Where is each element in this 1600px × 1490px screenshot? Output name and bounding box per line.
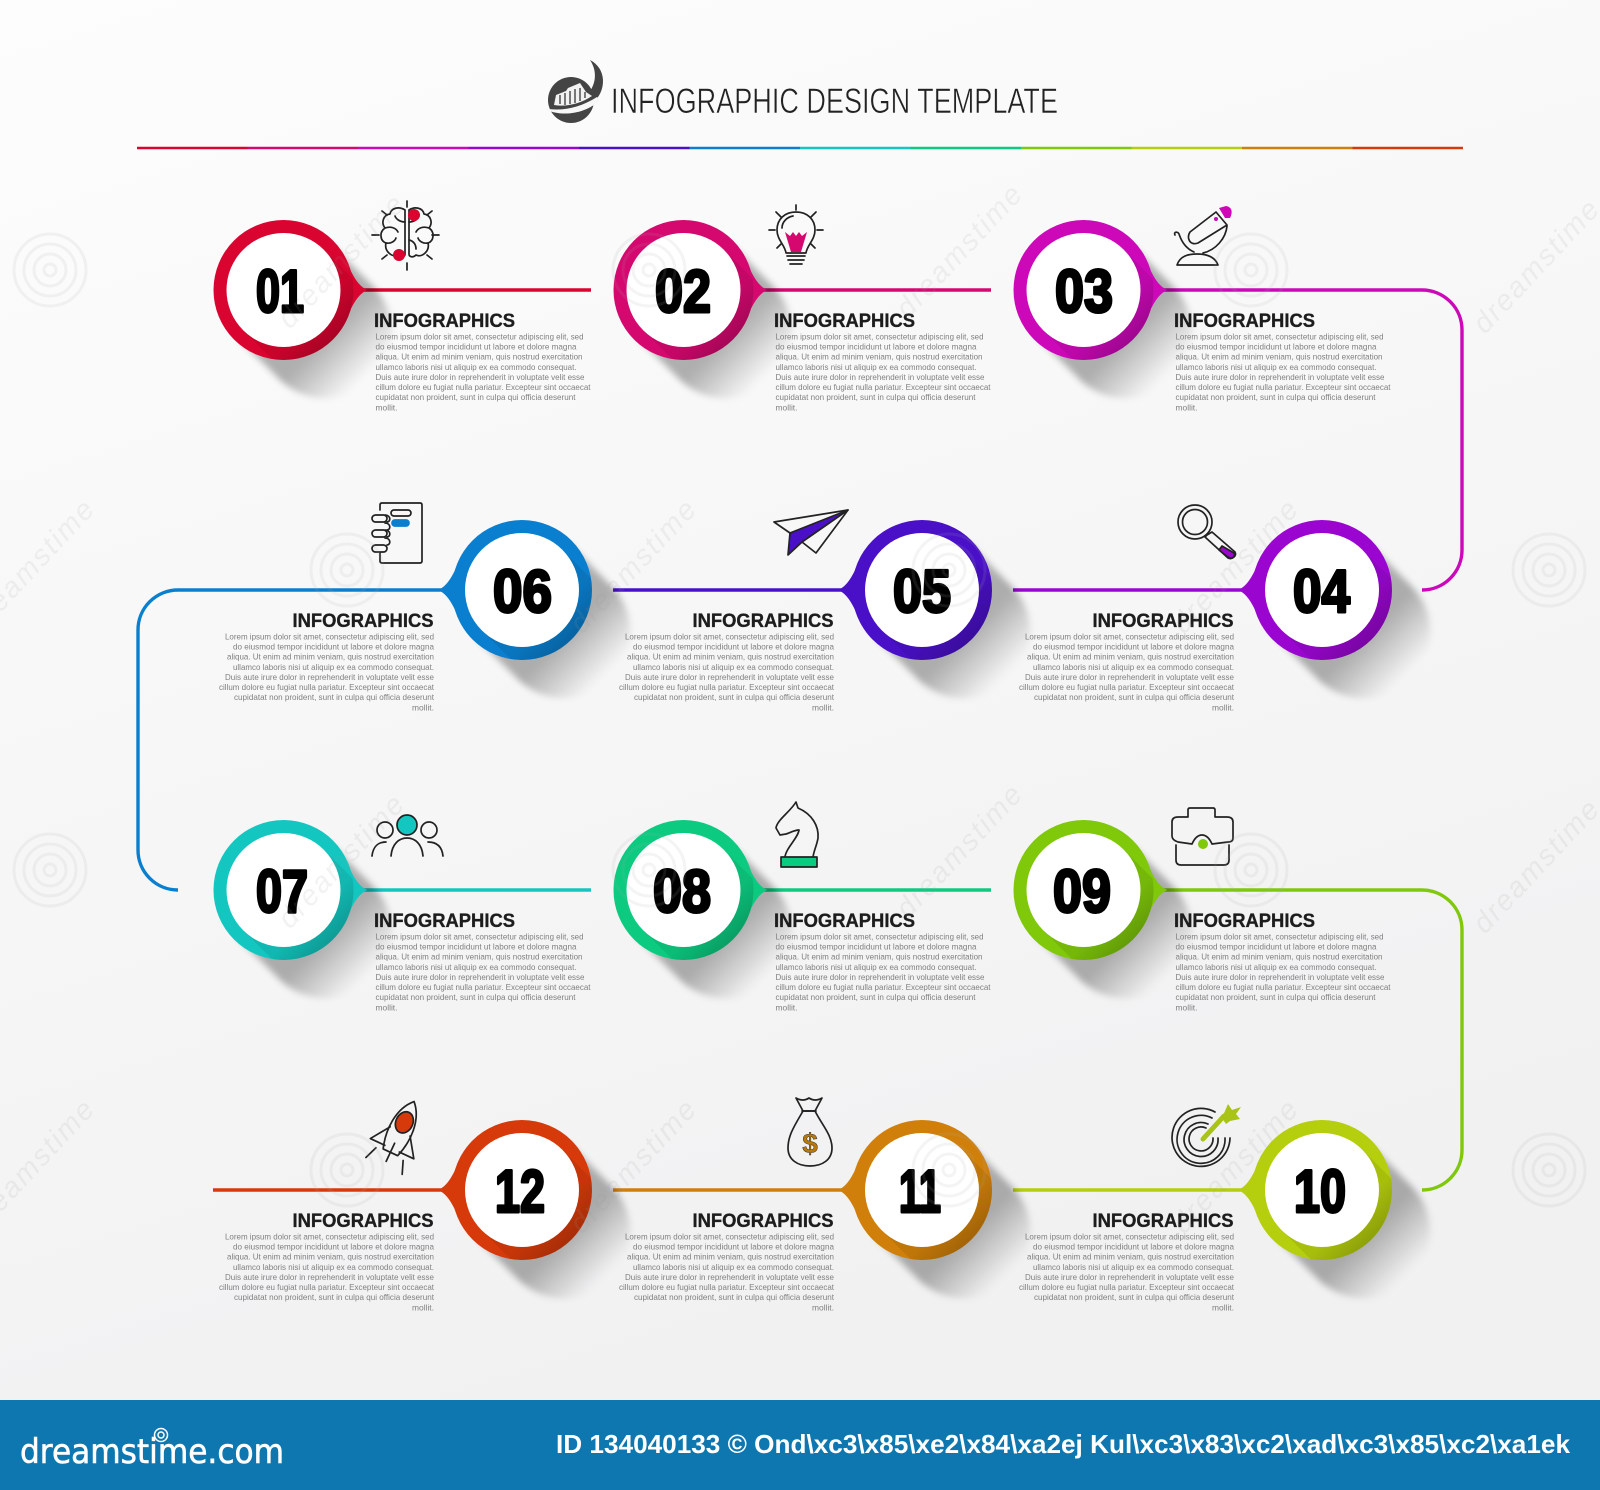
watermark text: dreamstime (890, 178, 1030, 325)
body text 12: cillum dolore eu fugiat nulla pariatur. Excepteur sint occaecat (219, 1282, 435, 1292)
badge 04 (1238, 520, 1458, 726)
step 06 (138, 503, 658, 890)
number 03: 03 (1055, 258, 1113, 325)
body text 06: Duis aute irure dolor in reprehenderit in voluptate velit esse (225, 672, 434, 682)
body text 04: Lorem ipsum dolor sit amet, consectetur adipiscing elit, sed (1025, 632, 1234, 642)
number 05: 05 (893, 558, 951, 625)
watermark text: dreamstime (1166, 1093, 1306, 1240)
body text 05: cillum dolore eu fugiat nulla pariatur. Excepteur sint occaecat (619, 682, 835, 692)
watermark text: dreamstime (564, 1093, 704, 1240)
icon: light bulb (769, 205, 823, 264)
icon: brain (372, 201, 439, 270)
body text 09: Lorem ipsum dolor sit amet, consectetur adipiscing elit, sed (1176, 932, 1384, 942)
icon: notebook (372, 503, 422, 563)
body text 05: Lorem ipsum dolor sit amet, consectetur adipiscing elit, sed (625, 632, 834, 642)
number 02: 02 (655, 258, 711, 325)
badge 12 (438, 1120, 658, 1326)
body text 09: do eiusmod tempor incididunt ut labore et dolore magna (1176, 942, 1377, 952)
body text 10: cillum dolore eu fugiat nulla pariatur. Excepteur sint occaecat (1019, 1282, 1235, 1292)
body text 08: ullamco laboris nisi ut aliquip ex ea commodo consequat. (776, 962, 976, 972)
body text 07: Duis aute irure dolor in reprehenderit in voluptate velit esse (376, 972, 585, 982)
body text 08: aliqua. Ut enim ad minim veniam, quis nostrud exercitation (776, 952, 983, 962)
connector 03 (1160, 290, 1462, 590)
body text 04: aliqua. Ut enim ad minim veniam, quis nostrud exercitation (1027, 652, 1234, 662)
badge 01 (214, 220, 419, 426)
connector 12 (213, 1188, 445, 1192)
number 04: 04 (1293, 558, 1351, 625)
body text 10: mollit. (1212, 1302, 1234, 1312)
body text 06 (219, 632, 435, 712)
connector 10 (1013, 1188, 1245, 1192)
icon: microscope (1175, 206, 1232, 265)
badge 05 (838, 520, 1058, 726)
icon: rocket (362, 1091, 436, 1176)
body text 07: mollit. (376, 1002, 398, 1012)
footer band (0, 1400, 1600, 1490)
step 09 (1014, 808, 1462, 1190)
body text 02: Lorem ipsum dolor sit amet, consectetur adipiscing elit, sed (776, 332, 984, 342)
body text 03: mollit. (1176, 402, 1198, 412)
body text 08: mollit. (776, 1002, 798, 1012)
watermark text: dreamstime (564, 493, 704, 640)
body text 11: ullamco laboris nisi ut aliquip ex ea commodo consequat. (633, 1262, 834, 1272)
body text 12: aliqua. Ut enim ad minim veniam, quis nostrud exercitation (227, 1252, 434, 1262)
connector 07 (360, 888, 591, 892)
body text 03 (1176, 332, 1391, 412)
body text 02: ullamco laboris nisi ut aliquip ex ea commodo consequat. (776, 362, 976, 372)
body text 03: Lorem ipsum dolor sit amet, consectetur adipiscing elit, sed (1176, 332, 1384, 342)
body text 03: aliqua. Ut enim ad minim veniam, quis nostrud exercitation (1176, 352, 1383, 362)
icon: magnifier (1178, 505, 1235, 559)
header title: INFOGRAPHIC DESIGN TEMPLATE (611, 82, 1058, 121)
badge 08 (614, 820, 819, 1026)
body text 07: aliqua. Ut enim ad minim veniam, quis nostrud exercitation (376, 952, 583, 962)
body text 05 (619, 632, 835, 712)
heading 05: INFOGRAPHICS (692, 610, 834, 632)
badge 09 (1014, 820, 1219, 1026)
heading 02: INFOGRAPHICS (774, 310, 915, 332)
body text 07: ullamco laboris nisi ut aliquip ex ea commodo consequat. (376, 962, 576, 972)
body text 06: mollit. (412, 702, 434, 712)
connector 06 (138, 590, 445, 890)
watermark text: dreamstime (890, 778, 1030, 925)
body text 05: aliqua. Ut enim ad minim veniam, quis nostrud exercitation (627, 652, 834, 662)
footer credit: ID 134040133 © Ond\xc3\x85\xe2\x84\xa2ej Kul\xc3\x83\xc2\xad\xc3\x85\xc2\xa1ek (556, 1429, 1571, 1459)
step 10 (1013, 1104, 1458, 1326)
body text 11: mollit. (812, 1302, 834, 1312)
heading 04: INFOGRAPHICS (1092, 610, 1234, 632)
body text 05: cupidatat non proident, sunt in culpa qui officia deserunt (634, 692, 835, 702)
body text 06: cupidatat non proident, sunt in culpa qui officia deserunt (234, 692, 435, 702)
body text 08: cillum dolore eu fugiat nulla pariatur. Excepteur sint occaecat (776, 982, 991, 992)
connector 05 (613, 588, 845, 592)
body text 12: cupidatat non proident, sunt in culpa qui officia deserunt (234, 1292, 435, 1302)
body text 08: Lorem ipsum dolor sit amet, consectetur adipiscing elit, sed (776, 932, 984, 942)
body text 09: aliqua. Ut enim ad minim veniam, quis nostrud exercitation (1176, 952, 1383, 962)
body text 10: ullamco laboris nisi ut aliquip ex ea commodo consequat. (1033, 1262, 1234, 1272)
step 04 (1013, 505, 1458, 726)
body text 06: ullamco laboris nisi ut aliquip ex ea commodo consequat. (233, 662, 434, 672)
body text 05: do eiusmod tempor incididunt ut labore et dolore magna (633, 642, 834, 652)
rainbow rule (137, 147, 1463, 149)
body text 07: cupidatat non proident, sunt in culpa qui officia deserunt (376, 992, 576, 1002)
badge 10 (1238, 1120, 1458, 1326)
body text 03: cillum dolore eu fugiat nulla pariatur. Excepteur sint occaecat (1176, 382, 1391, 392)
body text 11: do eiusmod tempor incididunt ut labore et dolore magna (633, 1242, 834, 1252)
heading 03: INFOGRAPHICS (1174, 310, 1315, 332)
body text 01: Lorem ipsum dolor sit amet, consectetur adipiscing elit, sed (376, 332, 584, 342)
body text 04: Duis aute irure dolor in reprehenderit in voluptate velit esse (1025, 672, 1234, 682)
body text 09: mollit. (1176, 1002, 1198, 1012)
heading 01: INFOGRAPHICS (374, 310, 515, 332)
body text 04: cupidatat non proident, sunt in culpa qui officia deserunt (1034, 692, 1235, 702)
body text 02: Duis aute irure dolor in reprehenderit in voluptate velit esse (776, 372, 985, 382)
step 01 (214, 201, 591, 426)
number 12: 12 (495, 1158, 545, 1225)
connector 08 (760, 888, 991, 892)
body text 02: cupidatat non proident, sunt in culpa qui officia deserunt (776, 392, 976, 402)
number 07: 07 (256, 858, 308, 925)
body text 11: cupidatat non proident, sunt in culpa qui officia deserunt (634, 1292, 835, 1302)
body text 10: Duis aute irure dolor in reprehenderit in voluptate velit esse (1025, 1272, 1234, 1282)
step 07 (214, 815, 591, 1026)
body text 09 (1176, 932, 1391, 1012)
heading 09: INFOGRAPHICS (1174, 910, 1315, 932)
body text 07: Lorem ipsum dolor sit amet, consectetur adipiscing elit, sed (376, 932, 584, 942)
body text 07 (376, 932, 591, 1012)
body text 05: Duis aute irure dolor in reprehenderit in voluptate velit esse (625, 672, 834, 682)
icon: money bag (788, 1098, 832, 1166)
connector 11 (613, 1188, 845, 1192)
number 06: 06 (493, 558, 552, 625)
body text 04 (1019, 632, 1235, 712)
body text 03: do eiusmod tempor incididunt ut labore et dolore magna (1176, 342, 1377, 352)
footer logo: dreamstime.com (20, 1432, 284, 1472)
body text 02 (776, 332, 991, 412)
body text 11: aliqua. Ut enim ad minim veniam, quis nostrud exercitation (627, 1252, 834, 1262)
body text 08: do eiusmod tempor incididunt ut labore et dolore magna (776, 942, 977, 952)
body text 06: aliqua. Ut enim ad minim veniam, quis nostrud exercitation (227, 652, 434, 662)
body text 01: cillum dolore eu fugiat nulla pariatur. Excepteur sint occaecat (376, 382, 591, 392)
body text 09: Duis aute irure dolor in reprehenderit in voluptate velit esse (1176, 972, 1385, 982)
body text 01: cupidatat non proident, sunt in culpa qui officia deserunt (376, 392, 576, 402)
watermark text: dreamstime (1166, 493, 1306, 640)
body text 12: Lorem ipsum dolor sit amet, consectetur adipiscing elit, sed (225, 1232, 434, 1242)
number 10: 10 (1294, 1158, 1346, 1225)
body text 08: cupidatat non proident, sunt in culpa qui officia deserunt (776, 992, 976, 1002)
body text 04: ullamco laboris nisi ut aliquip ex ea commodo consequat. (1033, 662, 1234, 672)
icon: people (372, 815, 443, 856)
heading 08: INFOGRAPHICS (774, 910, 915, 932)
watermark spirals (14, 234, 1585, 1206)
number 09: 09 (1053, 858, 1111, 925)
icon: chess knight (776, 802, 818, 867)
body text 05: mollit. (812, 702, 834, 712)
body text 07: do eiusmod tempor incididunt ut labore et dolore magna (376, 942, 577, 952)
body text 09: cillum dolore eu fugiat nulla pariatur. Excepteur sint occaecat (1176, 982, 1391, 992)
body text 01 (376, 332, 591, 412)
header logo (543, 60, 603, 123)
body text 12: do eiusmod tempor incididunt ut labore et dolore magna (233, 1242, 434, 1252)
body text 09: ullamco laboris nisi ut aliquip ex ea commodo consequat. (1176, 962, 1376, 972)
body text 10: Lorem ipsum dolor sit amet, consectetur adipiscing elit, sed (1025, 1232, 1234, 1242)
body text 12 (219, 1232, 435, 1312)
body text 04: mollit. (1212, 702, 1234, 712)
body text 07: cillum dolore eu fugiat nulla pariatur. Excepteur sint occaecat (376, 982, 591, 992)
body text 01: do eiusmod tempor incididunt ut labore et dolore magna (376, 342, 577, 352)
badge 07 (214, 820, 419, 1026)
body text 02: aliqua. Ut enim ad minim veniam, quis nostrud exercitation (776, 352, 983, 362)
body text 06: cillum dolore eu fugiat nulla pariatur. Excepteur sint occaecat (219, 682, 435, 692)
number 08: 08 (653, 858, 711, 925)
badge 11 (838, 1120, 1058, 1326)
body text 01: mollit. (376, 402, 398, 412)
body text 11 (619, 1232, 835, 1312)
body text 03: ullamco laboris nisi ut aliquip ex ea commodo consequat. (1176, 362, 1376, 372)
body text 12: Duis aute irure dolor in reprehenderit in voluptate velit esse (225, 1272, 434, 1282)
body text 10: aliqua. Ut enim ad minim veniam, quis nostrud exercitation (1027, 1252, 1234, 1262)
body text 01: aliqua. Ut enim ad minim veniam, quis nostrud exercitation (376, 352, 583, 362)
body text 10: cupidatat non proident, sunt in culpa qui officia deserunt (1034, 1292, 1235, 1302)
step 12 (213, 1091, 658, 1326)
body text 04: do eiusmod tempor incididunt ut labore et dolore magna (1033, 642, 1234, 652)
body text 09: cupidatat non proident, sunt in culpa qui officia deserunt (1176, 992, 1376, 1002)
icon: target (1172, 1104, 1241, 1166)
watermark text (0, 178, 1600, 1240)
body text 06: Lorem ipsum dolor sit amet, consectetur adipiscing elit, sed (225, 632, 434, 642)
step 03 (1014, 206, 1462, 590)
heading 07: INFOGRAPHICS (374, 910, 515, 932)
step 08 (614, 802, 991, 1026)
body text 11: cillum dolore eu fugiat nulla pariatur. Excepteur sint occaecat (619, 1282, 835, 1292)
connector 09 (1160, 890, 1462, 1190)
number 11: 11 (899, 1158, 941, 1225)
body text 04: cillum dolore eu fugiat nulla pariatur. Excepteur sint occaecat (1019, 682, 1235, 692)
connector 04 (1013, 588, 1245, 592)
step 02 (614, 205, 991, 426)
body text 03: cupidatat non proident, sunt in culpa qui officia deserunt (1176, 392, 1376, 402)
number 01: 01 (256, 258, 304, 325)
body text 10: do eiusmod tempor incididunt ut labore et dolore magna (1033, 1242, 1234, 1252)
body text 08 (776, 932, 991, 1012)
badge 06 (438, 520, 658, 726)
heading 12: INFOGRAPHICS (292, 1210, 434, 1232)
body text 06: do eiusmod tempor incididunt ut labore et dolore magna (233, 642, 434, 652)
icon: briefcase (1172, 808, 1233, 865)
heading 06: INFOGRAPHICS (292, 610, 434, 632)
icon: paper plane (774, 510, 848, 555)
step 11 (613, 1098, 1058, 1326)
icon: money bag: $ (802, 1128, 818, 1159)
body text 08: Duis aute irure dolor in reprehenderit in voluptate velit esse (776, 972, 985, 982)
body text 02: do eiusmod tempor incididunt ut labore et dolore magna (776, 342, 977, 352)
body text 05: ullamco laboris nisi ut aliquip ex ea commodo consequat. (633, 662, 834, 672)
footer logo spiral (154, 1428, 168, 1442)
connector 01 (360, 288, 591, 292)
badge 02 (614, 220, 819, 426)
body text 02: mollit. (776, 402, 798, 412)
badge 03 (1014, 220, 1219, 426)
connector 02 (760, 288, 991, 292)
body text 11: Duis aute irure dolor in reprehenderit in voluptate velit esse (625, 1272, 834, 1282)
watermark text: dreamstime (272, 188, 412, 335)
body text 10 (1019, 1232, 1235, 1312)
body text 02: cillum dolore eu fugiat nulla pariatur. Excepteur sint occaecat (776, 382, 991, 392)
body text 01: ullamco laboris nisi ut aliquip ex ea commodo consequat. (376, 362, 576, 372)
watermark text: dreamstime (272, 788, 412, 935)
body text 12: mollit. (412, 1302, 434, 1312)
heading 10: INFOGRAPHICS (1092, 1210, 1234, 1232)
body text 11: Lorem ipsum dolor sit amet, consectetur adipiscing elit, sed (625, 1232, 834, 1242)
step 05 (613, 510, 1058, 726)
body text 01: Duis aute irure dolor in reprehenderit in voluptate velit esse (376, 372, 585, 382)
body text 03: Duis aute irure dolor in reprehenderit in voluptate velit esse (1176, 372, 1385, 382)
body text 12: ullamco laboris nisi ut aliquip ex ea commodo consequat. (233, 1262, 434, 1272)
heading 11: INFOGRAPHICS (692, 1210, 834, 1232)
